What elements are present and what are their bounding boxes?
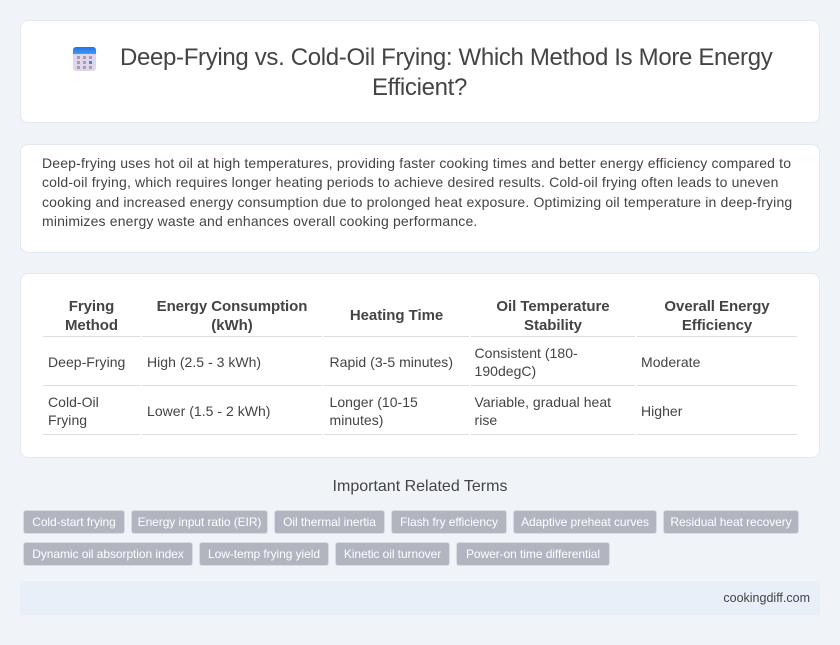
intro paragraph: cold-oil frying, which requires longer heating periods to achieve desired results. Cold-oil frying often leads to uneven (42, 174, 779, 190)
intro paragraph: minimizes energy waste and enhances overall cooking performance. (42, 213, 477, 229)
table row: cold-oil frying (48, 394, 682, 428)
table row: deep-frying: High (2.5 - 3 kWh) (147, 354, 261, 370)
table row: cold-oil frying: Higher (641, 403, 682, 419)
related terms tags: Kinetic oil turnover (344, 547, 441, 561)
related terms tags: Residual heat recovery (670, 515, 792, 529)
table header: (kWh) (211, 317, 253, 334)
related terms tags: Energy input ratio (EIR) (138, 515, 261, 529)
table row: deep-frying: Deep-Frying (48, 354, 125, 370)
table row: cold-oil frying: Lower (1.5 - 2 kWh) (147, 403, 270, 419)
panel: intro text card (20, 144, 820, 253)
table header: Oil Temperature (496, 298, 610, 315)
panel: comparison table card (20, 273, 820, 458)
table row: deep-frying: Rapid (3-5 minutes) (330, 354, 453, 370)
related terms tags: Cold-start frying (32, 515, 116, 529)
table header: Method (65, 317, 118, 334)
table row: cold-oil frying: minutes) (330, 412, 383, 428)
table row: deep-frying (48, 345, 700, 379)
table row: cold-oil frying: Cold-Oil (48, 394, 99, 410)
related terms tags: Low-temp frying yield (208, 547, 320, 561)
table header: Energy Consumption (157, 298, 307, 315)
table header: Stability (524, 317, 582, 334)
panel: title card (20, 20, 820, 123)
related terms tags: Flash fry efficiency (400, 515, 498, 529)
related terms tags (23, 510, 799, 566)
icon: calendar (73, 47, 96, 71)
related terms tags: Power-on time differential (466, 547, 600, 561)
title: Efficient? (372, 74, 467, 101)
intro paragraph: cooking and increased energy consumption due to prolonged heat exposure. Optimizing oil temperature in deep-frying (42, 194, 792, 210)
related terms tags: Adaptive preheat curves (521, 515, 649, 529)
table row: cold-oil frying: Frying (48, 412, 87, 428)
table row: deep-frying: 190degC) (474, 363, 536, 379)
heading: important related terms: Important Related Terms (333, 478, 507, 495)
table row: cold-oil frying: Variable, gradual heat (474, 394, 611, 410)
table header: Efficiency (682, 317, 752, 334)
related terms tags: Oil thermal inertia (283, 515, 376, 529)
title: Deep-Frying vs. Cold-Oil Frying: Which Method Is More Energy (120, 44, 772, 71)
table row: deep-frying: Moderate (641, 354, 700, 370)
table row: cold-oil frying: Longer (10-15 (330, 394, 418, 410)
table header: Frying (69, 298, 114, 315)
footer bar (20, 581, 820, 615)
source: cookingdiff.com (723, 590, 810, 604)
table header: Heating Time (350, 307, 443, 324)
table row: deep-frying: Consistent (180- (474, 345, 578, 361)
title (120, 44, 773, 101)
table header: Overall Energy (664, 298, 770, 315)
intro paragraph: Deep-frying uses hot oil at high temperatures, providing faster cooking times and better energy efficiency compared to (42, 155, 791, 171)
table row: cold-oil frying: rise (474, 412, 497, 428)
table header (65, 298, 770, 334)
related terms tags: Dynamic oil absorption index (32, 547, 184, 561)
intro paragraph (42, 155, 792, 229)
